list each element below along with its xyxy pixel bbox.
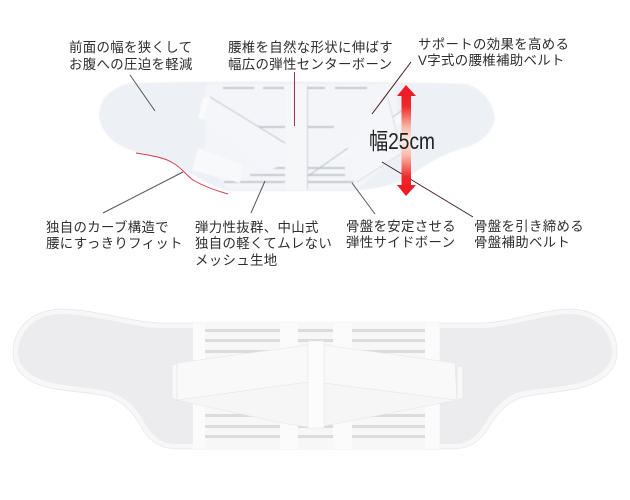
callout: mesh fabric: 弾力性抜群、中山式 xyxy=(195,220,319,235)
width label: 幅25cm xyxy=(369,128,435,154)
callout: center bone: 幅広の弾性センターボーン xyxy=(228,57,392,72)
support straps xyxy=(172,341,463,428)
callout: mesh fabric: 独自の軽くてムレない xyxy=(195,236,332,251)
callout: V belt: V字式の腰椎補助ベルト xyxy=(418,53,565,68)
callout: pelvic belt: 骨盤補助ベルト xyxy=(474,235,570,250)
callout: curve structure: 独自のカーブ構造で xyxy=(46,219,169,235)
callout: pelvic belt xyxy=(474,219,584,250)
back belt illustration xyxy=(13,309,617,449)
callout: curve structure xyxy=(46,219,183,251)
callout: mesh fabric xyxy=(195,220,332,268)
callout: front width: 前面の幅を狭くして xyxy=(69,39,192,55)
callout: side bones xyxy=(346,219,456,250)
callout: center bone xyxy=(228,39,393,72)
callout: V belt: サポートの効果を高める xyxy=(418,36,569,52)
callout: front width xyxy=(69,39,193,72)
center mesh panel xyxy=(193,323,440,449)
callout: side bones: 弾性サイドボーン xyxy=(346,235,455,250)
callout: side bones: 骨盤を安定させる xyxy=(346,219,456,234)
width arrow xyxy=(397,85,416,196)
front belt illustration xyxy=(99,82,495,191)
side bones xyxy=(193,323,439,449)
callout: pelvic belt: 骨盤を引き締める xyxy=(474,219,584,234)
callout: front width: お腹への圧迫を軽減 xyxy=(69,56,193,72)
callout: mesh fabric: メッシュ生地 xyxy=(195,253,278,268)
callout: curve structure: 腰にすっきりフィット xyxy=(46,236,183,251)
callout: center bone: 腰椎を自然な形状に伸ばす xyxy=(228,39,393,55)
callout: V belt xyxy=(418,36,569,68)
leader lines xyxy=(103,62,473,217)
